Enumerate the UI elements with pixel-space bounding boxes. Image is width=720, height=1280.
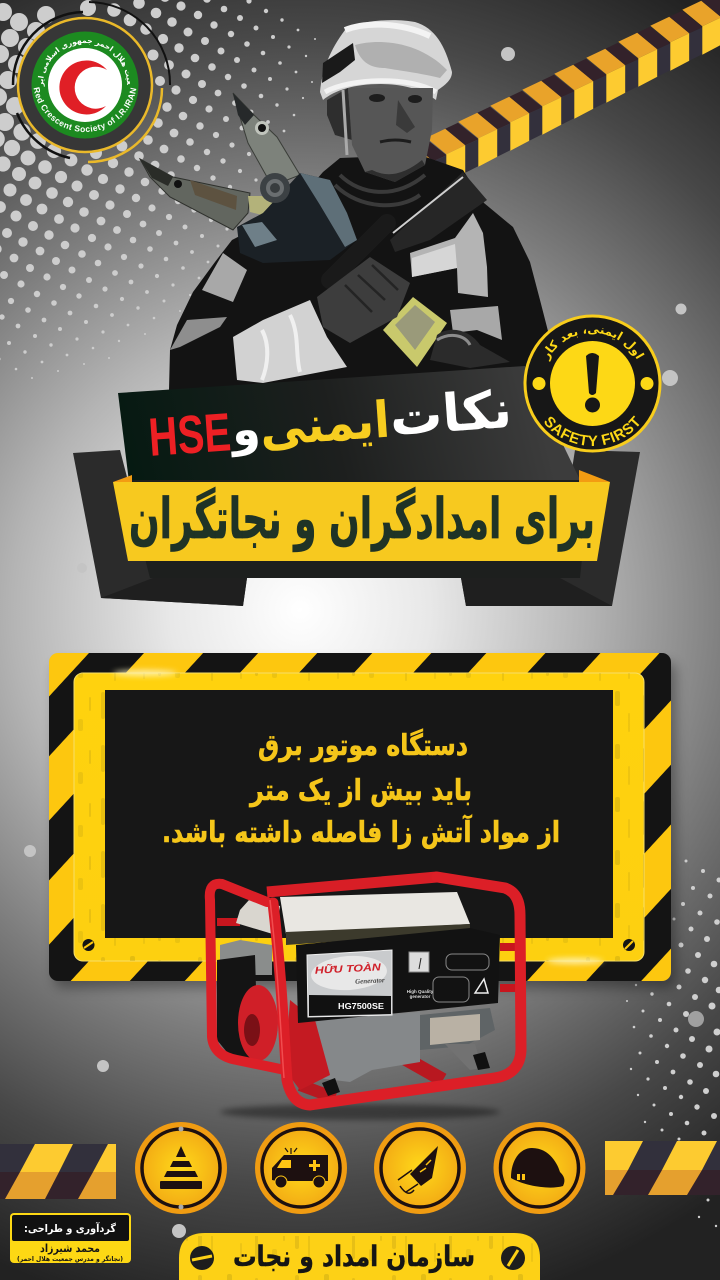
yellow bar [113,482,610,561]
generator: generator [410,994,431,999]
tape segment: left [0,1144,116,1199]
title line 1: HSE: HSE [147,402,233,468]
credit name: محمد شیرزاد [40,1242,100,1255]
engine silver block [317,1012,420,1082]
panel text line 1: دستگاه موتور برق [258,728,468,762]
dark upper panel [118,366,581,490]
generator: High Quality [407,989,434,994]
face [327,88,352,140]
halftone dots: lower right [626,860,720,1227]
brand label: Generator [355,976,385,986]
badge english text: SAFETY FIRST [544,416,640,446]
helmet [320,20,452,100]
dark lower bar [125,480,590,578]
engine black housing [217,955,258,1062]
white fuel tank [236,900,280,935]
jacket [169,155,549,390]
footer text: سازمان امداد و نجات [233,1240,475,1273]
rescuer with hydraulic cutter [140,20,549,390]
icon: hard hat [494,1122,586,1214]
red pull-start cover [238,985,278,1061]
hazard frame panel [49,653,676,988]
reflective patches [410,213,488,297]
crescent [59,60,107,114]
screws [82,939,635,951]
logo english text: Red Crescent Society of I.R.IRAN [34,87,136,132]
hazard tape: top right [394,0,720,199]
title line 1: and: و [228,401,262,457]
credit heading [12,1215,129,1241]
back ribbon left [73,450,247,606]
credit role: (نجاتگر و مدرس جمعیت هلال احمر) [17,1255,123,1263]
brand label: HG7500SE [338,1002,385,1011]
author credit box [10,1213,131,1263]
engine top silver parts [220,940,272,975]
footer screws [190,1246,525,1270]
logo: Red Crescent Society [12,1,171,164]
handle [330,223,387,280]
glove [317,257,410,343]
outer striped frame [49,653,671,981]
warning triangle [475,979,488,993]
organization footer tab [179,1233,540,1280]
brand label [307,950,392,1017]
exclamation mark [586,353,599,395]
outlets and switches [446,954,489,970]
yellow bar folds [113,475,132,482]
control panel [296,928,500,1023]
panel text line 2: باید بیش از یک متر [248,773,472,807]
icon: traffic cone [135,1122,227,1214]
gauge [409,952,429,972]
icon: hydraulic cutter [374,1122,466,1214]
back ribbon right [461,450,640,606]
title banner [73,366,640,606]
cutter tool [233,93,300,180]
icon: ambulance [255,1122,347,1214]
generator [210,877,521,1120]
inner yellow frame [74,673,644,961]
yellow cylinder [383,297,447,367]
brand label: HỮU TOÀN [315,960,382,977]
halftone dots: top left [0,0,316,379]
tape segment: right [605,1141,720,1195]
title line 1: safety: ایمنی [258,391,392,458]
badge persian text: اول ایمنی، بعد کار [544,328,644,362]
title line 1: tips: نکات [388,380,514,448]
author credit box: گردآوری و طراحی: [24,1222,117,1235]
back frame bars [267,877,437,892]
front frame tube [273,877,521,1105]
safety first badge [524,314,662,452]
panel text line 3: از مواد آتش زا فاصله داشته باشد. [162,814,560,849]
black board [105,690,613,938]
